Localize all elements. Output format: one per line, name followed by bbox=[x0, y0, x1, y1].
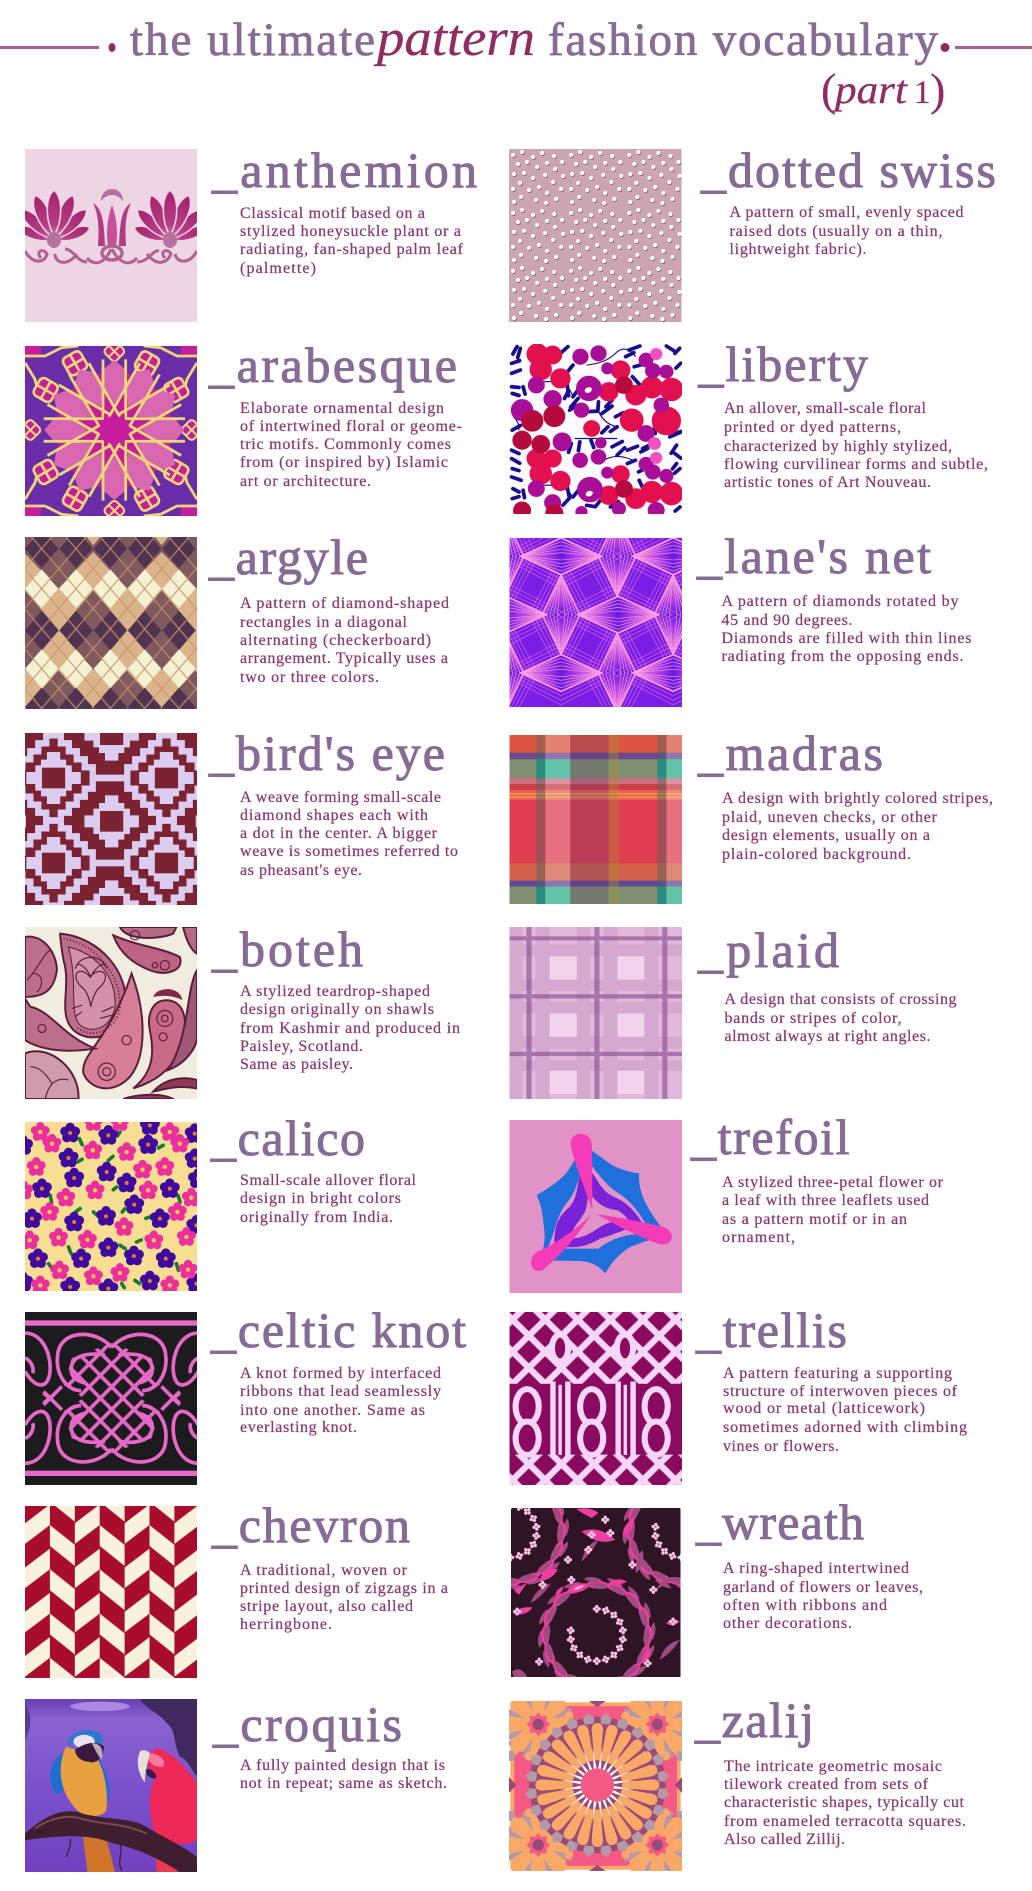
panel: plaid bbox=[510, 922, 956, 1099]
text: liberty definition: printed or dyed patterns, bbox=[724, 419, 901, 436]
text: calico definition: Small-scale allover floral bbox=[240, 1172, 417, 1189]
subtitle: part 1: 1 bbox=[914, 75, 930, 111]
heading: croquis: _croquis bbox=[212, 1696, 402, 1752]
heading: arabesque: _arabesque bbox=[208, 337, 457, 393]
swatch: argyle bbox=[25, 537, 197, 709]
swatch: celtic knot bbox=[25, 1312, 197, 1485]
swatch: wreath bbox=[511, 1508, 680, 1677]
heading: zalij: _zalij bbox=[694, 1692, 814, 1748]
text: wreath definition: other decorations. bbox=[723, 1615, 852, 1632]
panel: chevron bbox=[25, 1497, 448, 1678]
heading: trellis: _trellis bbox=[695, 1302, 847, 1358]
text: calico definition bbox=[240, 1172, 417, 1226]
text: boteh definition: A stylized teardrop-shaped bbox=[240, 983, 430, 1000]
text: madras definition: plain-colored background. bbox=[722, 846, 911, 863]
text: zalij definition: Also called Zillij. bbox=[724, 1831, 845, 1848]
text: dotted swiss definition bbox=[730, 204, 964, 258]
text: trellis definition bbox=[723, 1365, 967, 1455]
text: madras definition bbox=[722, 790, 993, 863]
heading: boteh: _boteh bbox=[211, 921, 363, 977]
text: wreath definition: often with ribbons and bbox=[723, 1597, 887, 1614]
heading: wreath: _wreath bbox=[695, 1494, 864, 1550]
text: boteh definition: from Kashmir and produced in bbox=[240, 1020, 460, 1037]
text: zalij definition: tilework created from sets of bbox=[724, 1776, 929, 1793]
swatch: trefoil bbox=[510, 1120, 682, 1293]
swatch: calico bbox=[25, 1122, 197, 1291]
subtitle: part 1: ( bbox=[821, 64, 836, 115]
text: anthemion definition: stylized honeysuckle plant or a bbox=[240, 223, 461, 240]
heading: chevron: _chevron bbox=[211, 1497, 410, 1553]
swatch: arabesque bbox=[25, 346, 197, 516]
panel: anthemion bbox=[16, 142, 477, 322]
title: the ultimate bbox=[130, 14, 375, 66]
text: boteh definition bbox=[240, 983, 460, 1073]
text: arabesque definition: tric motifs. Commonly comes bbox=[240, 436, 451, 453]
text: chevron definition bbox=[240, 1562, 448, 1633]
panel: zalij bbox=[501, 1687, 966, 1882]
swatch: anthemion bbox=[25, 149, 197, 322]
text: trellis definition: wood or metal (latticework) bbox=[723, 1400, 925, 1417]
text: plaid definition: A design that consists of crossing bbox=[724, 991, 956, 1008]
text: chevron definition: A traditional, woven or bbox=[240, 1562, 408, 1579]
text: liberty definition: artistic tones of Art Nouveau. bbox=[724, 474, 931, 491]
text: liberty definition: An allover, small-scale floral bbox=[724, 400, 927, 417]
text: chevron definition: stripe layout, also called bbox=[240, 1598, 413, 1615]
text: lane's net definition bbox=[722, 593, 972, 665]
text: celtic knot definition bbox=[240, 1365, 441, 1436]
text: zalij definition: characteristic shapes, typically cut bbox=[724, 1794, 965, 1811]
text: argyle definition: A pattern of diamond-shaped bbox=[240, 595, 449, 612]
title: pattern bbox=[373, 10, 535, 67]
text: anthemion definition: (palmette) bbox=[240, 260, 316, 277]
text: wreath definition bbox=[723, 1560, 923, 1632]
text: croquis definition bbox=[240, 1757, 447, 1792]
swatch: liberty bbox=[510, 344, 682, 514]
swatch: lane's net bbox=[510, 538, 682, 707]
text: calico definition: originally from India. bbox=[240, 1209, 393, 1226]
panel: arabesque bbox=[19, 337, 462, 522]
panel: lane's net bbox=[445, 496, 971, 733]
text: plaid definition: almost always at right angles. bbox=[724, 1028, 930, 1045]
swatch: chevron bbox=[25, 1506, 197, 1678]
text: argyle definition: two or three colors. bbox=[240, 669, 379, 686]
text: trellis definition: sometimes adorned with climbing bbox=[723, 1419, 967, 1436]
heading: anthemion: _anthemion bbox=[211, 142, 477, 198]
text: anthemion definition: Classical motif based on a bbox=[240, 205, 425, 222]
text: plaid definition: bands or stripes of color, bbox=[724, 1010, 902, 1027]
swatch: madras bbox=[510, 735, 682, 904]
text: dotted swiss definition: A pattern of small, evenly spaced bbox=[730, 204, 964, 221]
text: bird's eye definition: a dot in the center. A bigger bbox=[240, 825, 438, 842]
text: boteh definition: Paisley, Scotland. bbox=[240, 1038, 363, 1055]
heading: madras: _madras bbox=[697, 725, 883, 781]
swatch: bird's eye bbox=[25, 733, 197, 905]
text: celtic knot definition: into one another. Same as bbox=[240, 1402, 425, 1419]
panel: celtic knot bbox=[25, 1302, 466, 1485]
text: plaid definition bbox=[724, 991, 956, 1045]
text: trefoil definition: a leaf with three leaflets used bbox=[722, 1192, 929, 1209]
text: celtic knot definition: A knot formed by interfaced bbox=[240, 1365, 441, 1382]
panel: bird's eye bbox=[0, 709, 458, 932]
text: bird's eye definition: weave is sometimes referred to bbox=[240, 843, 458, 860]
panel: dotted swiss bbox=[509, 142, 996, 322]
swatch: trellis bbox=[510, 1312, 682, 1485]
text: liberty definition bbox=[724, 400, 988, 491]
text: trellis definition: A pattern featuring a supporting bbox=[723, 1365, 952, 1382]
swatch: croquis bbox=[25, 1699, 197, 1872]
text: trefoil definition: ornament, bbox=[722, 1229, 795, 1246]
panel: trefoil bbox=[510, 1109, 944, 1293]
swatch: boteh bbox=[25, 927, 197, 1099]
text: lane's net definition: Diamonds are filled with thin lines bbox=[722, 630, 972, 647]
text: zalij definition: The intricate geometric mosaic bbox=[724, 1758, 942, 1775]
subtitle: part 1: part bbox=[832, 67, 908, 112]
text: croquis definition: not in repeat; same as sketch. bbox=[240, 1775, 447, 1792]
panel: wreath bbox=[447, 1469, 923, 1698]
text: bird's eye definition: as pheasant's eye. bbox=[240, 862, 362, 879]
text: trefoil definition: A stylized three-petal flower or bbox=[722, 1174, 944, 1191]
text: liberty definition: flowing curvilinear forms and subtle, bbox=[724, 456, 988, 473]
heading: dotted swiss: _dotted swiss bbox=[700, 142, 996, 198]
text: lane's net definition: radiating from the opposing ends. bbox=[722, 648, 964, 665]
text: argyle definition: arrangement. Typically uses a bbox=[240, 650, 448, 667]
heading: trefoil: _trefoil bbox=[690, 1109, 850, 1165]
text: celtic knot definition: ribbons that lead seamlessly bbox=[240, 1383, 441, 1400]
heading: bird's eye: _bird's eye bbox=[208, 725, 445, 781]
heading: argyle: _argyle bbox=[208, 529, 368, 585]
text: chevron definition: herringbone. bbox=[240, 1616, 332, 1633]
text: lane's net definition: 45 and 90 degrees. bbox=[722, 612, 852, 629]
text: arabesque definition: Elaborate ornamental design bbox=[240, 400, 444, 417]
heading: calico: _calico bbox=[210, 1110, 365, 1166]
text: trellis definition: vines or flowers. bbox=[723, 1438, 839, 1455]
text: argyle definition: rectangles in a diagonal bbox=[240, 614, 408, 631]
heading: lane's net: _lane's net bbox=[696, 528, 931, 584]
text: trefoil definition: as a pattern motif or in an bbox=[722, 1211, 907, 1228]
text: lane's net definition: A pattern of diamonds rotated by bbox=[722, 593, 958, 610]
text: liberty definition: characterized by highly stylized, bbox=[724, 438, 952, 455]
text: bird's eye definition: diamond shapes each with bbox=[240, 807, 428, 824]
text: zalij definition bbox=[724, 1758, 966, 1848]
text: bird's eye definition bbox=[240, 789, 458, 879]
text: dotted swiss definition: raised dots (usually on a thin, bbox=[730, 223, 942, 240]
swatch: plaid bbox=[510, 927, 682, 1099]
text: argyle definition: alternating (checkerboard) bbox=[240, 632, 431, 649]
text: croquis definition: A fully painted design that is bbox=[240, 1757, 445, 1774]
text: celtic knot definition: everlasting knot. bbox=[240, 1419, 357, 1436]
text: arabesque definition: art or architecture. bbox=[240, 473, 371, 490]
heading: liberty: _liberty bbox=[698, 336, 868, 392]
text: trefoil definition bbox=[722, 1174, 944, 1246]
text: bird's eye definition: A weave forming small-scale bbox=[240, 789, 441, 806]
title bbox=[0, 10, 1032, 67]
heading: plaid: _plaid bbox=[697, 922, 839, 978]
text: wreath definition: garland of flowers or leaves, bbox=[723, 1579, 923, 1596]
panel: liberty bbox=[510, 336, 988, 521]
text: arabesque definition bbox=[240, 400, 462, 490]
text: madras definition: design elements, usually on a bbox=[722, 827, 930, 844]
panel: argyle bbox=[0, 529, 449, 726]
text: boteh definition: Same as paisley. bbox=[240, 1056, 353, 1073]
text: calico definition: design in bright colors bbox=[240, 1190, 401, 1207]
panel: madras bbox=[510, 725, 993, 904]
text: wreath definition: A ring-shaped intertwined bbox=[723, 1560, 909, 1577]
panel: boteh bbox=[25, 921, 460, 1099]
text: madras definition: plaid, uneven checks, or other bbox=[722, 809, 938, 826]
text: arabesque definition: from (or inspired by) Islamic bbox=[240, 454, 448, 471]
text: zalij definition: from enameled terracotta squares. bbox=[724, 1813, 966, 1830]
panel: trellis bbox=[510, 1302, 967, 1485]
text: dotted swiss definition: lightweight fabric). bbox=[730, 241, 866, 258]
swatch: zalij bbox=[509, 1701, 682, 1871]
text: madras definition: A design with brightly colored stripes, bbox=[722, 790, 993, 807]
panel: croquis bbox=[25, 1696, 447, 1872]
text: argyle definition bbox=[240, 595, 449, 686]
title: fashion vocabulary bbox=[548, 14, 938, 66]
subtitle: part 1 bbox=[821, 64, 945, 115]
text: arabesque definition: of intertwined floral or geome- bbox=[240, 418, 462, 435]
subtitle: part 1: ) bbox=[930, 64, 945, 115]
panel: calico bbox=[13, 1110, 417, 1298]
heading: celtic knot: _celtic knot bbox=[210, 1302, 466, 1358]
text: boteh definition: design originally on shawls bbox=[240, 1001, 434, 1018]
text: chevron definition: printed design of zigzags in a bbox=[240, 1580, 448, 1597]
swatch: dotted swiss bbox=[509, 149, 682, 322]
text: anthemion definition bbox=[240, 205, 464, 277]
text: anthemion definition: radiating, fan-shaped palm leaf bbox=[240, 241, 464, 258]
text: trellis definition: structure of interwoven pieces of bbox=[723, 1383, 958, 1400]
